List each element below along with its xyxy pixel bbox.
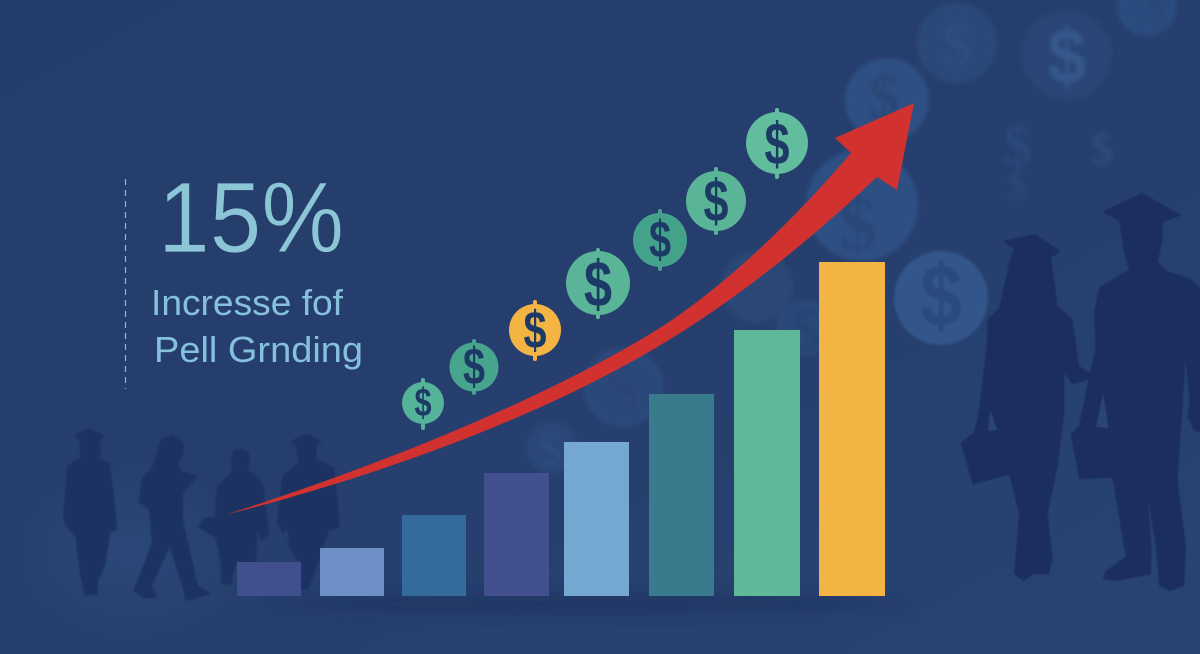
faint background coins: $ — [1090, 123, 1114, 174]
bar 1 — [237, 562, 301, 596]
bar 7 — [734, 330, 800, 596]
faint background coins: $ — [791, 297, 821, 363]
bar 5 — [564, 442, 629, 596]
statistic: 15%: 15% — [158, 162, 344, 274]
coin 6 — [686, 167, 746, 235]
bar shadow — [270, 597, 910, 611]
background glow left — [10, 460, 250, 640]
gaps between arms and bags — [988, 393, 1108, 431]
bar chart — [237, 262, 885, 596]
faint background coins: $ — [1004, 113, 1032, 178]
faint background coins: $ — [1007, 162, 1027, 207]
coin 5: $ — [649, 211, 671, 269]
coin 3 — [509, 300, 561, 361]
faint coin right of chart: $ — [920, 246, 962, 345]
silhouette: graduate 2 — [278, 435, 338, 588]
caption line 2: Pell Grnding — [154, 329, 363, 370]
faint background coins: $ — [1048, 12, 1086, 100]
bar 6 — [649, 394, 714, 596]
bar 2 — [320, 548, 384, 596]
silhouette: walking student — [135, 436, 208, 599]
right graduate silhouettes — [962, 194, 1200, 590]
faint coin right of chart — [894, 246, 988, 345]
bar 3 — [402, 515, 466, 596]
caption — [151, 282, 363, 370]
caption line 1: Incresse fof — [151, 282, 344, 323]
coin 1 — [402, 378, 444, 430]
faint background coins: $ — [839, 183, 877, 267]
faint background coins: $ — [538, 423, 562, 474]
dollar coins — [402, 108, 808, 430]
coin 4: $ — [584, 247, 612, 320]
silhouette: male graduate — [1072, 194, 1200, 590]
faint background coins: $ — [942, 11, 972, 77]
coin 2: $ — [463, 338, 485, 396]
red growth arrow — [225, 103, 914, 515]
silhouette: graduate 1 — [64, 430, 116, 595]
coin 2 — [450, 338, 498, 396]
silhouette: student with bag — [200, 450, 268, 583]
coin 1: $ — [414, 381, 432, 425]
bar 4 — [484, 473, 549, 596]
coin 6: $ — [704, 168, 728, 234]
left student silhouettes — [64, 430, 338, 599]
coin 7 — [746, 108, 808, 179]
faint background coins: $ — [868, 64, 900, 132]
coin 4 — [566, 247, 630, 320]
coin 3: $ — [524, 301, 546, 360]
dashed divider — [124, 179, 126, 389]
faint background coins: $ — [606, 351, 640, 428]
faint background coins — [526, 0, 1177, 474]
coin 7: $ — [764, 111, 790, 177]
silhouette: female graduate — [962, 235, 1093, 580]
coin 5 — [633, 209, 687, 271]
bar 8 — [819, 262, 885, 596]
